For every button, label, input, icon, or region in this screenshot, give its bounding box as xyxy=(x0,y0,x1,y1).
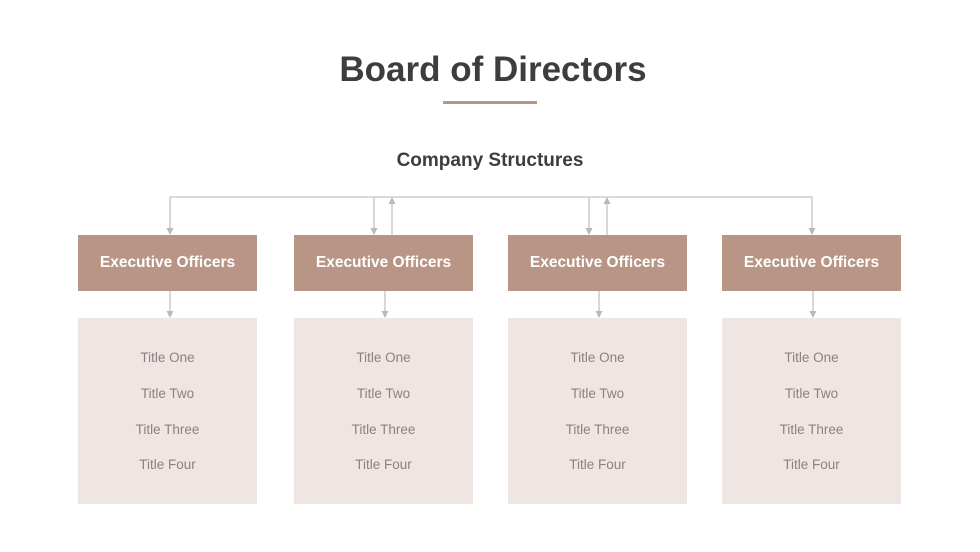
panel 1 header xyxy=(78,235,257,291)
panel 4 body xyxy=(722,318,901,504)
panel 1 header: Executive Officers xyxy=(100,254,235,271)
panel 2 header: Executive Officers xyxy=(316,254,451,271)
panel 4 body: Title Three xyxy=(780,422,843,437)
panel 2 body: Title Three xyxy=(352,422,415,437)
panel 2 body xyxy=(294,318,473,504)
panel 4 body: Title Two xyxy=(785,386,838,401)
panel 1 body xyxy=(78,318,257,504)
panel 4 header: Executive Officers xyxy=(744,254,879,271)
panel 3 header: Executive Officers xyxy=(530,254,665,271)
panel 3 body: Title Four xyxy=(569,457,626,472)
panel 4 header xyxy=(722,235,901,291)
panel 4 body: Title One xyxy=(784,350,839,365)
panel 2 body: Title Two xyxy=(357,386,410,401)
panel 3 body xyxy=(508,318,687,504)
panel 2 body: Title Four xyxy=(355,457,412,472)
panel 2 header xyxy=(294,235,473,291)
title underline xyxy=(443,101,537,104)
panel 2 body: Title One xyxy=(356,350,411,365)
panel 1 body: Title Two xyxy=(141,386,194,401)
panel 3 body: Title Two xyxy=(571,386,624,401)
panel 1 body: Title Three xyxy=(136,422,199,437)
panel 3 header xyxy=(508,235,687,291)
title: Board of Directors xyxy=(339,50,647,89)
subtitle: Company Structures xyxy=(397,150,583,171)
panel 3 body: Title Three xyxy=(566,422,629,437)
panel 3 body: Title One xyxy=(570,350,625,365)
panel 4 body: Title Four xyxy=(783,457,840,472)
panel 1 body: Title Four xyxy=(139,457,196,472)
panel 1 body: Title One xyxy=(140,350,195,365)
